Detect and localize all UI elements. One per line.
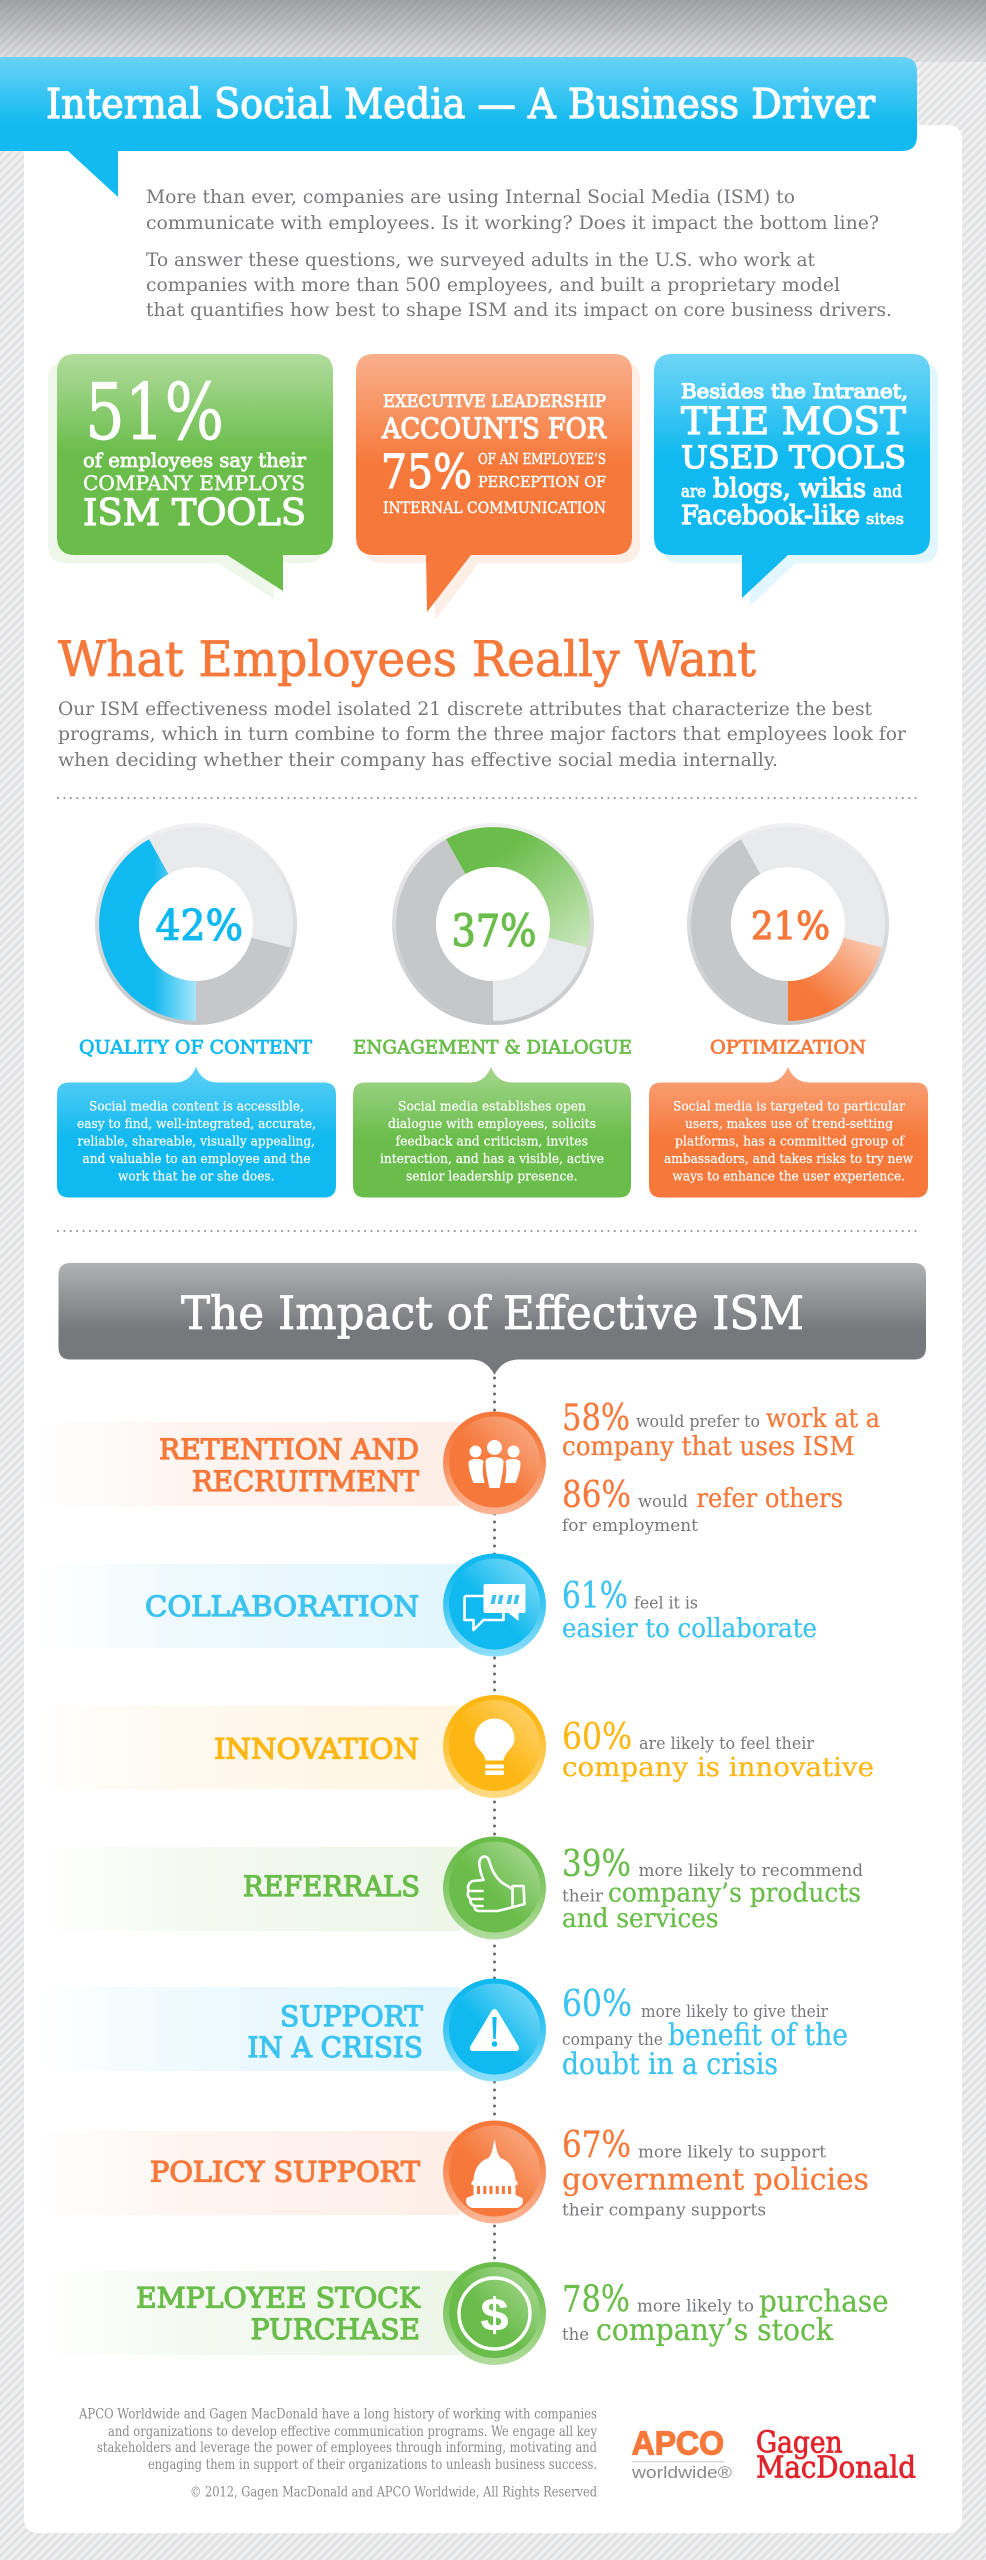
- icon: capitol dome: [443, 2120, 546, 2224]
- panel: quality of content description: and valuable to an employee and the: [82, 1152, 311, 1167]
- factor label: optimization: OPTIMIZATION: [710, 1036, 866, 1058]
- panel: blue most used tools bubble: blogs, wikis: [713, 474, 866, 504]
- panel: optimization description: [649, 1067, 928, 1198]
- stat text: would: [638, 1492, 688, 1512]
- logo: APCO worldwide: [631, 2425, 733, 2482]
- section paragraph: [58, 698, 907, 771]
- stat text: their company supports: [562, 2201, 766, 2221]
- intro paragraphs: More than ever, companies are using Internal Social Media (ISM) to: [146, 186, 795, 208]
- stat text: 39%: [562, 1844, 631, 1885]
- icon: light bulb: [443, 1695, 546, 1798]
- panel: blue most used tools bubble: THE MOST: [681, 400, 906, 443]
- panel: green 51% stat bubble: COMPANY EMPLOYS: [83, 471, 305, 495]
- stat text: for employment: [562, 1516, 698, 1536]
- factor label: engagement and dialogue: ENGAGEMENT & DIALOGUE: [353, 1036, 632, 1058]
- panel: quality of content description: [57, 1067, 336, 1198]
- stat text: benefit of the: [668, 2018, 848, 2053]
- stat text: government policies: [562, 2163, 869, 2198]
- intro paragraphs: communicate with employees. Is it working? Does it impact the bottom line?: [146, 212, 879, 234]
- impact row: support in a crisis: SUPPORT: [280, 2000, 423, 2033]
- impact row: employee stock purchase: [40, 2262, 888, 2365]
- stat text: more likely to: [637, 2297, 754, 2317]
- footer text: [78, 2406, 597, 2500]
- intro paragraphs: companies with more than 500 employees, and built a proprietary model: [146, 274, 840, 296]
- panel: green 51% stat bubble: of employees say their: [83, 448, 306, 472]
- impact row: support in a crisis: [40, 1978, 848, 2082]
- stat text: feel it is: [634, 1594, 698, 1614]
- panel: green 51% stat bubble: ISM TOOLS: [83, 493, 306, 534]
- stat text: [562, 1717, 874, 1783]
- impact row: referrals: [40, 1836, 863, 1940]
- stat text: work at a: [766, 1404, 880, 1434]
- panel: blue most used tools bubble: are: [681, 482, 706, 502]
- footer text: engaging them in support of their organizations to unleash business success.: [148, 2457, 597, 2473]
- panel: green 51% stat bubble: 51%: [85, 368, 224, 458]
- icon: dollar coin: $: [480, 2288, 509, 2340]
- panel: optimization description: platforms, has a committed group of: [675, 1135, 905, 1150]
- stat text: 58%: [562, 1398, 630, 1439]
- impact row: retention and recruitment: RECRUITMENT: [192, 1465, 419, 1498]
- impact row: retention and recruitment: [40, 1398, 880, 1536]
- impact row: referrals: REFERRALS: [243, 1870, 420, 1903]
- footer text: APCO Worldwide and Gagen MacDonald have a long history of working with companies: [78, 2406, 597, 2422]
- panel: engagement and dialogue description: dialogue with employees, solicits: [388, 1117, 596, 1132]
- panel: quality of content description: work that he or she does.: [118, 1169, 274, 1184]
- impact row: innovation: [40, 1695, 874, 1798]
- stat text: [562, 1398, 880, 1536]
- donut chart: quality of content 42%: [95, 823, 297, 1025]
- panel: quality of content description: easy to find, well-integrated, accurate,: [77, 1117, 316, 1132]
- stat text: the: [562, 2325, 589, 2345]
- impact row: collaboration: COLLABORATION: [145, 1590, 419, 1623]
- stat text: 61%: [562, 1576, 628, 1617]
- footer text: © 2012, Gagen MacDonald and APCO Worldwide, All Rights Reserved: [190, 2484, 597, 2500]
- stat text: 78%: [562, 2280, 630, 2321]
- stat text: [562, 2280, 888, 2348]
- stat text: would prefer to: [636, 1412, 760, 1432]
- section banner: the impact of effective ISM: [58, 1263, 926, 1375]
- impact row: support in a crisis: IN A CRISIS: [248, 2031, 423, 2064]
- panel: blue most used tools bubble: [654, 354, 938, 606]
- stat text: refer others: [696, 1484, 843, 1514]
- stat text: company is innovative: [562, 1753, 874, 1783]
- factor label: quality of content: QUALITY OF CONTENT: [79, 1036, 312, 1058]
- footer text: and organizations to develop effective communication programs. We engage all key: [108, 2424, 597, 2440]
- stat text: 60%: [562, 1717, 632, 1758]
- panel: blue most used tools bubble: Besides the Intranet,: [681, 379, 908, 403]
- icon: thumbs up: [443, 1836, 546, 1940]
- panel: orange 75% stat bubble: 75%: [381, 445, 472, 500]
- panel: optimization description: ways to enhance the user experience.: [672, 1169, 905, 1184]
- impact row: retention and recruitment: RETENTION AND: [159, 1433, 419, 1466]
- section paragraph: when deciding whether their company has effective social media internally.: [58, 749, 778, 771]
- icon: group of people: [443, 1412, 546, 1514]
- stat text: company’s products: [608, 1878, 861, 1908]
- donut chart: quality of content 42%: 42%: [156, 901, 243, 950]
- logo: Gagen MacDonald: [756, 2426, 916, 2485]
- logo: APCO worldwide: APCO: [632, 2425, 724, 2462]
- panel: engagement and dialogue description: Social media establishes open: [398, 1100, 587, 1115]
- stat text: company the: [562, 2030, 663, 2050]
- intro paragraphs: To answer these questions, we surveyed adults in the U.S. who work at: [146, 249, 815, 271]
- logo: Gagen MacDonald: Gagen: [756, 2426, 842, 2461]
- panel: quality of content description: reliable, shareable, visually appealing,: [78, 1135, 315, 1150]
- panel: orange 75% stat bubble: INTERNAL COMMUNICATION: [383, 498, 606, 517]
- logo: APCO worldwide: worldwide®: [631, 2463, 733, 2482]
- panel: orange 75% stat bubble: EXECUTIVE LEADERSHIP: [383, 392, 606, 412]
- stat text: [562, 1984, 848, 2082]
- section paragraph: programs, which in turn combine to form the three major factors that employees look for: [58, 723, 907, 745]
- icon: dollar coin: [443, 2262, 546, 2365]
- section banner: the impact of effective ISM: The Impact of Effective ISM: [181, 1286, 804, 1340]
- intro paragraphs: that quantifies how best to shape ISM and its impact on core business drivers.: [146, 299, 892, 321]
- donut chart: optimization 21%: [687, 823, 889, 1025]
- stat text: more likely to recommend: [638, 1861, 863, 1881]
- banner speech bubble shape: [0, 57, 917, 197]
- donut chart: engagement and dialogue 37%: 37%: [452, 906, 536, 957]
- panel: blue most used tools bubble: sites: [866, 510, 904, 528]
- donut chart: optimization 21%: 21%: [751, 904, 830, 948]
- stat text: doubt in a crisis: [562, 2047, 778, 2082]
- heading: what employees really want: What Employees Really Want: [58, 631, 756, 688]
- panel: engagement and dialogue description: feedback and criticism, invites: [396, 1135, 588, 1150]
- panel: orange 75% stat bubble: OF AN EMPLOYEE’S: [478, 450, 606, 468]
- panel: blue most used tools bubble: and: [873, 482, 902, 502]
- stat text: purchase: [759, 2285, 888, 2320]
- icon: warning triangle: [443, 1978, 546, 2082]
- stat text: and services: [562, 1904, 718, 1934]
- impact row: policy support: [40, 2120, 869, 2224]
- impact row: policy support: POLICY SUPPORT: [150, 2156, 420, 2189]
- panel: blue most used tools bubble: USED TOOLS: [681, 440, 906, 476]
- panel: green 51% stat bubble: [48, 354, 333, 599]
- stat text: more likely to give their: [641, 2002, 829, 2022]
- title banner: [0, 57, 917, 197]
- panel: orange 75% stat bubble: PERCEPTION OF: [478, 473, 606, 491]
- impact row: employee stock purchase: PURCHASE: [251, 2313, 420, 2346]
- panel: optimization description: users, makes use of trend-setting: [685, 1117, 893, 1132]
- impact row: employee stock purchase: EMPLOYEE STOCK: [136, 2281, 421, 2314]
- stat text: company that uses ISM: [562, 1432, 854, 1462]
- intro paragraphs: [146, 186, 892, 321]
- panel: optimization description: Social media is targeted to particular: [673, 1100, 906, 1115]
- impact row: innovation: INNOVATION: [214, 1732, 419, 1765]
- stat text: 60%: [562, 1984, 632, 2025]
- impact row: collaboration: [40, 1554, 817, 1656]
- stat text: [562, 2125, 869, 2221]
- panel: blue most used tools bubble: Facebook-like: [681, 501, 860, 531]
- logo: Gagen MacDonald: MacDonald: [756, 2450, 916, 2485]
- panel: engagement and dialogue description: interaction, and has a visible, active: [380, 1152, 604, 1167]
- panel: optimization description: ambassadors, and takes risks to try new: [664, 1152, 913, 1167]
- icon: speech bubbles: [443, 1554, 546, 1656]
- title text: Internal Social Media — A Business Driver: [46, 80, 875, 128]
- stat text: easier to collaborate: [562, 1614, 817, 1644]
- panel: orange 75% stat bubble: [356, 354, 640, 620]
- section paragraph: Our ISM effectiveness model isolated 21 discrete attributes that characterize the best: [58, 698, 872, 720]
- footer text: stakeholders and leverage the power of employees through informing, motivating and: [97, 2440, 597, 2456]
- panel: orange 75% stat bubble: ACCOUNTS FOR: [381, 412, 607, 445]
- stat text: more likely to support: [638, 2143, 826, 2163]
- panel: engagement and dialogue description: [353, 1067, 631, 1198]
- donut chart: engagement and dialogue 37%: [392, 823, 594, 1025]
- stat text: 67%: [562, 2125, 631, 2166]
- panel: quality of content description: Social media content is accessible,: [89, 1100, 304, 1115]
- stat text: [562, 1844, 863, 1934]
- stat text: are likely to feel their: [639, 1734, 815, 1754]
- panel: engagement and dialogue description: senior leadership presence.: [406, 1169, 578, 1184]
- stat text: [562, 1576, 817, 1644]
- stat text: their: [562, 1886, 604, 1906]
- stat text: 86%: [562, 1475, 631, 1516]
- stat text: company’s stock: [596, 2313, 834, 2348]
